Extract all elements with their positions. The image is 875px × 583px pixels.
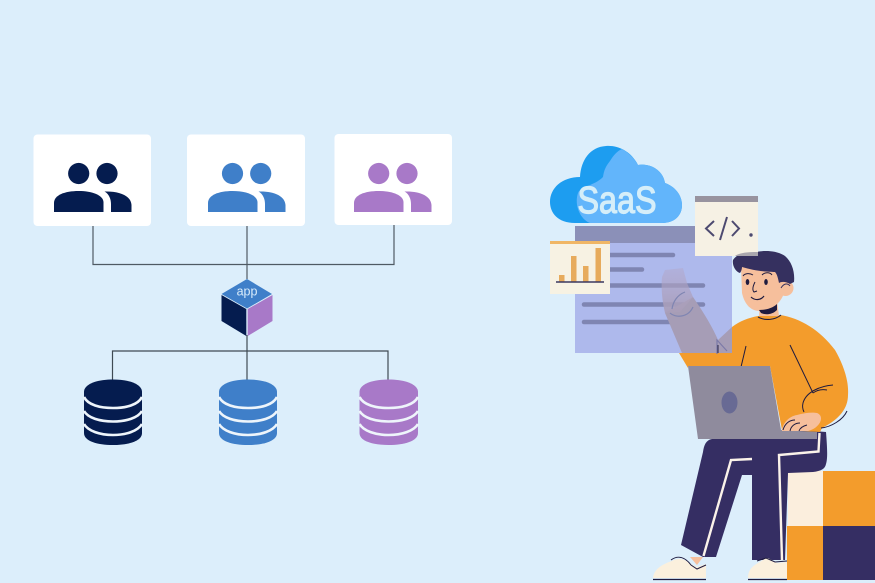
- dot: [749, 233, 753, 237]
- trousers: [681, 430, 827, 560]
- hair: [733, 251, 794, 284]
- neck shadow: [759, 304, 777, 314]
- icon: app cube: [222, 279, 272, 336]
- icon: navy database: [84, 380, 142, 445]
- ankle: [690, 557, 703, 565]
- neck and collar: [758, 300, 781, 319]
- ear detail: [781, 284, 790, 288]
- icon: purple users: [354, 163, 432, 212]
- laptop logo: [722, 392, 738, 414]
- left eyebrow: [743, 274, 753, 276]
- left shoe: [653, 557, 706, 580]
- connector lines: app to databases: [112, 335, 388, 381]
- block seat: [787, 471, 875, 580]
- person: [653, 251, 848, 580]
- code symbol: [706, 217, 739, 240]
- orange sweater: [679, 315, 848, 432]
- right shoe: [748, 558, 787, 580]
- right eyebrow: [762, 273, 772, 275]
- icon: navy users: [54, 163, 132, 212]
- hand on laptop: [782, 413, 821, 431]
- sweater creases: [741, 345, 847, 428]
- ear: [778, 280, 794, 296]
- panel: bar chart card: [550, 241, 610, 294]
- panel: tenant 2: [187, 134, 305, 226]
- icon: blue users: [208, 163, 286, 212]
- icon: SaaS cloud: [550, 146, 682, 223]
- label: SaaS: SaaS: [578, 180, 656, 222]
- right eye: [764, 279, 768, 285]
- panel: code card: [695, 196, 758, 256]
- laptop: [688, 366, 817, 439]
- connector lines: tenants to app: [93, 225, 394, 279]
- nose: [753, 282, 757, 292]
- panel: document window: [575, 226, 732, 353]
- head: [733, 251, 794, 314]
- left eye: [746, 279, 749, 285]
- panel: tenant 3: [334, 134, 452, 225]
- translucent raised arm and hand: [662, 268, 732, 354]
- hair showing through card: [735, 252, 758, 256]
- icon: purple database: [360, 380, 418, 445]
- document text lines: [584, 255, 703, 322]
- chart bars: [559, 248, 601, 282]
- icon: blue database: [219, 380, 277, 445]
- panel: tenant 1: [34, 134, 151, 226]
- chart axis: [556, 281, 604, 283]
- smile: [751, 296, 764, 300]
- label: app: app: [237, 284, 257, 298]
